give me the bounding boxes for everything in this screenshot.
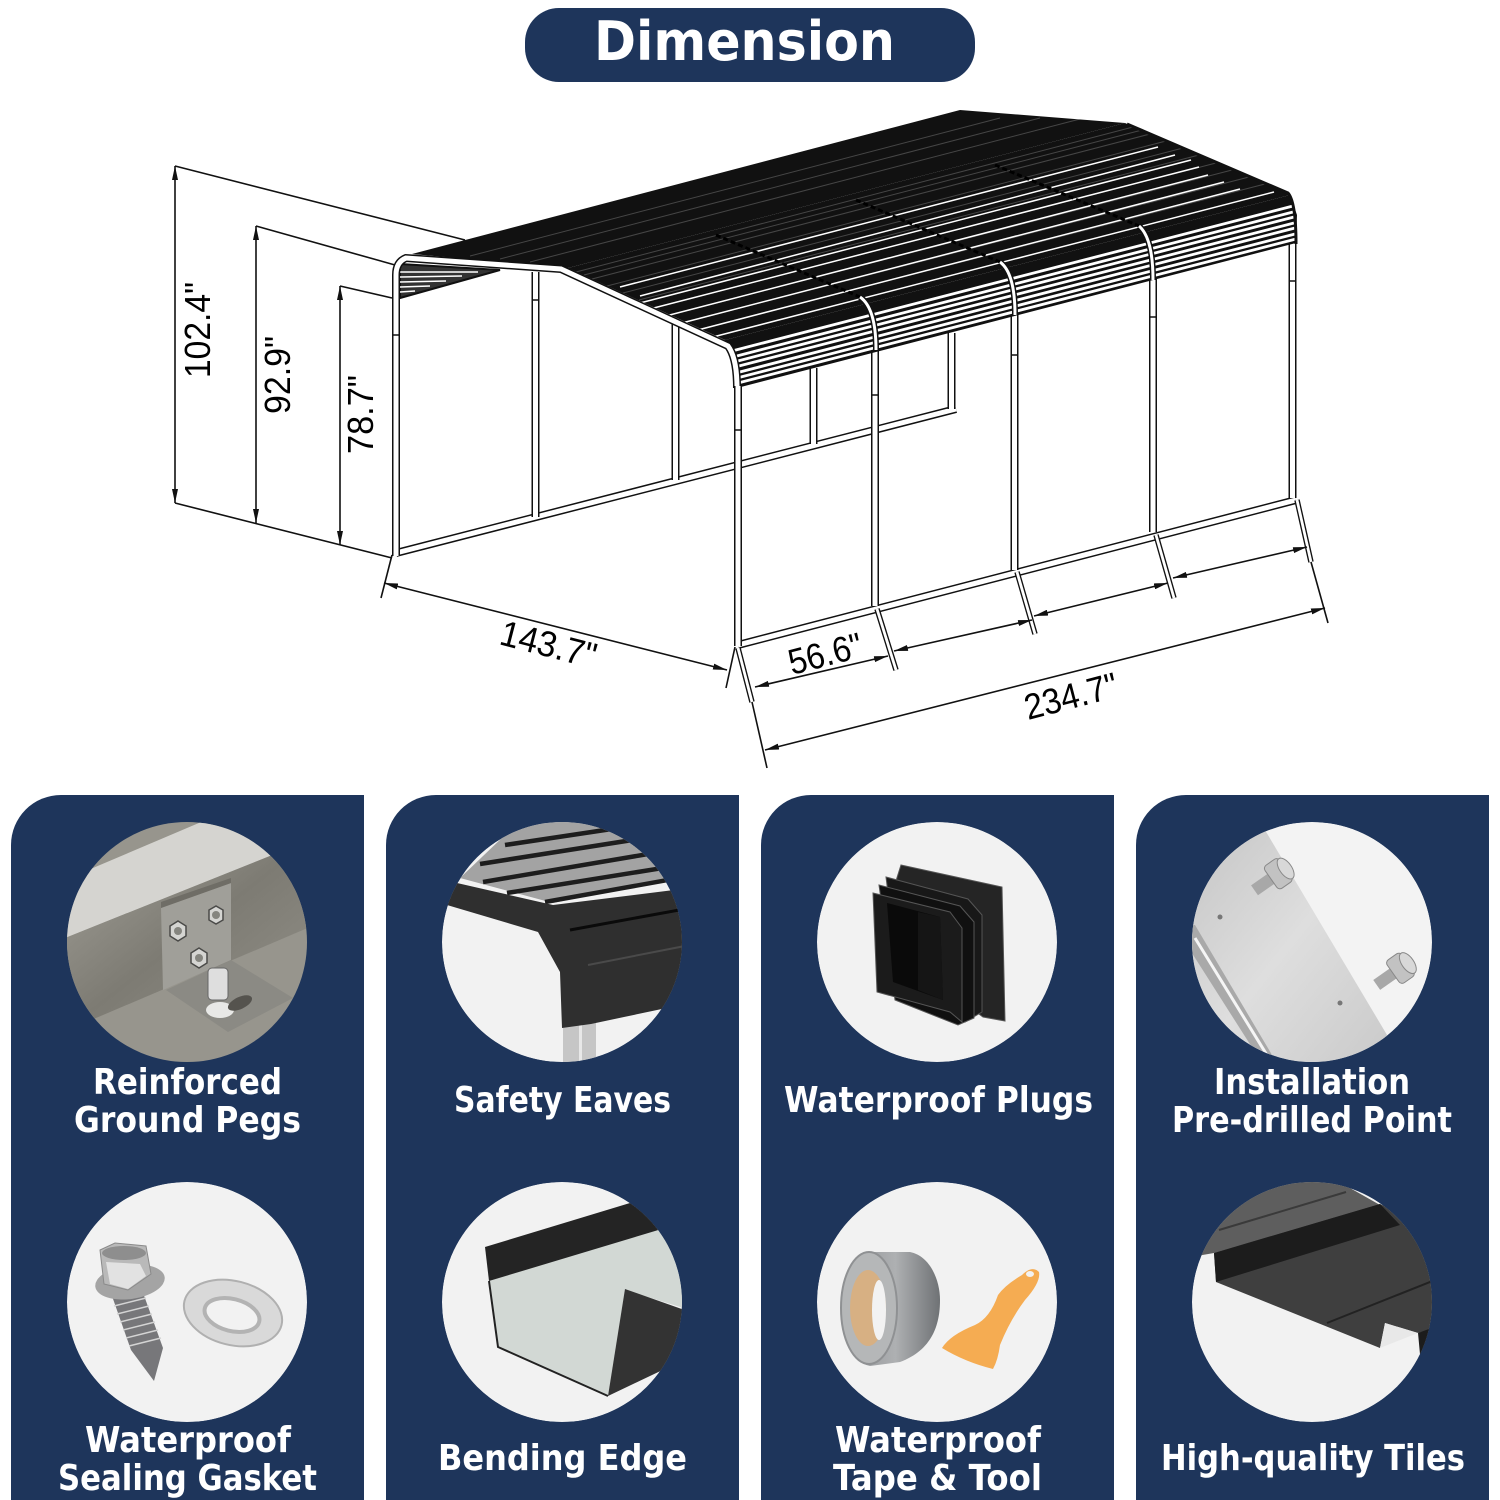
label: Tape & Tool: Tape & Tool bbox=[833, 1458, 1042, 1499]
back wall rail and far posts bbox=[396, 272, 956, 553]
icon: reinforced ground peg photo bbox=[67, 822, 307, 1062]
label: Ground Pegs: Ground Pegs bbox=[74, 1100, 301, 1141]
icon: safety eaves photo bbox=[442, 822, 682, 1062]
label: 102.4 inches: 102.4" bbox=[177, 282, 218, 378]
front gable frame bbox=[392, 258, 1296, 646]
label: Waterproof Plugs: Waterproof Plugs bbox=[784, 1080, 1093, 1121]
icon: waterproof plug bbox=[817, 822, 1057, 1062]
label: Reinforced: Reinforced bbox=[93, 1062, 282, 1103]
label: 56.6 inches: 56.6" bbox=[784, 624, 867, 683]
icon: sealing screw and gasket bbox=[67, 1182, 307, 1422]
panel: column 1 bbox=[11, 780, 364, 1500]
dimension annotations bbox=[175, 166, 1328, 768]
icon: bending edge photo bbox=[442, 1182, 690, 1422]
label: 92.9 inches: 92.9" bbox=[257, 336, 298, 414]
label: Bending Edge: Bending Edge bbox=[438, 1438, 687, 1479]
front side posts and bottom rail bbox=[738, 240, 1296, 645]
panel: column 3 bbox=[761, 795, 1114, 1500]
icon: high-quality tiles photo bbox=[1185, 1175, 1440, 1422]
roof underside bbox=[400, 264, 500, 298]
label: 143.7 inches: 143.7" bbox=[496, 612, 601, 676]
title: Dimension bbox=[525, 8, 975, 82]
panel: column 2 bbox=[386, 795, 739, 1500]
label: Installation: Installation bbox=[1214, 1062, 1410, 1103]
icon: pre-drilled point photo bbox=[1190, 815, 1432, 1070]
label: Waterproof: Waterproof bbox=[85, 1420, 291, 1461]
carport line drawing bbox=[392, 110, 1297, 646]
roof panels bbox=[412, 110, 1297, 388]
title: Dimension: Dimension bbox=[594, 10, 895, 73]
label: Safety Eaves: Safety Eaves bbox=[454, 1080, 671, 1121]
panel: column 4 bbox=[1136, 795, 1489, 1500]
label: 234.7 inches: 234.7" bbox=[1020, 664, 1122, 728]
label: Sealing Gasket: Sealing Gasket bbox=[58, 1458, 317, 1499]
label: 78.7 inches: 78.7" bbox=[340, 375, 381, 454]
label: Pre-drilled Point: Pre-drilled Point bbox=[1172, 1100, 1452, 1141]
icon: tape and tool bbox=[817, 1182, 1057, 1422]
label: Waterproof: Waterproof bbox=[835, 1420, 1041, 1461]
